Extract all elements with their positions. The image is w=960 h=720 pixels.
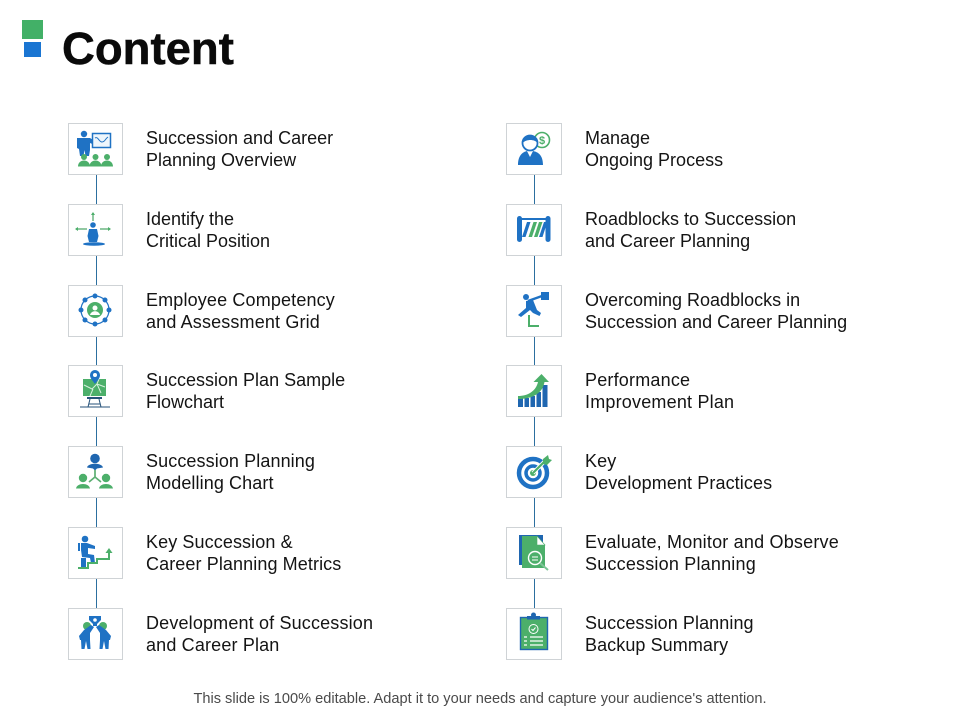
label — [585, 451, 772, 493]
icon: two people lifting a trophy — [68, 608, 123, 660]
label: Backup Summary — [585, 635, 728, 655]
label: Critical Position — [146, 231, 270, 251]
title: Content — [62, 23, 234, 74]
label — [585, 532, 839, 574]
item: Overcoming Roadblocks in Succession and Career Planning — [506, 285, 847, 337]
item: Key Development Practices — [506, 446, 772, 498]
icon: manager with dollar coin — [506, 123, 562, 175]
label: Evaluate, Monitor and Observe — [585, 532, 839, 552]
item: Key Succession & Career Planning Metrics — [68, 527, 341, 579]
label: Development Practices — [585, 473, 772, 493]
label — [146, 128, 333, 170]
label: Succession Planning — [585, 613, 754, 633]
label: Overcoming Roadblocks in — [585, 290, 800, 310]
label — [585, 128, 723, 170]
label: Planning Overview — [146, 150, 296, 170]
item: Succession and Career Planning Overview — [68, 123, 333, 175]
label: Development of Succession — [146, 613, 373, 633]
item: Succession Planning Modelling Chart — [68, 446, 315, 498]
item: Employee Competency and Assessment Grid — [68, 285, 335, 337]
item: Succession Plan Sample Flowchart — [68, 365, 345, 417]
icon: runner leaping hurdle — [506, 285, 562, 337]
label: Succession Plan Sample — [146, 370, 345, 390]
icon: presenter with audience — [68, 123, 123, 175]
label — [146, 532, 341, 574]
label — [146, 451, 315, 493]
item: Succession Planning Backup Summary — [506, 608, 754, 660]
label: Employee Competency — [146, 290, 335, 310]
item: Evaluate, Monitor and Observe Succession Planning — [506, 527, 839, 579]
label — [146, 290, 335, 332]
icon: road barrier — [506, 204, 562, 256]
icon: document with magnifier — [506, 527, 562, 579]
label: Key Succession & — [146, 532, 293, 552]
label — [585, 209, 796, 251]
label: Succession and Career — [146, 128, 333, 148]
icon: manager with dollar coin: $ — [539, 135, 545, 147]
label: and Career Planning — [585, 231, 750, 251]
icon: map on easel with pin — [68, 365, 123, 417]
label: and Assessment Grid — [146, 312, 320, 332]
item: Development of Succession and Career Plan — [68, 608, 373, 660]
item: Manage Ongoing Process — [506, 123, 723, 175]
label: Ongoing Process — [585, 150, 723, 170]
label: Improvement Plan — [585, 392, 734, 412]
label: Key — [585, 451, 616, 471]
label: Flowchart — [146, 392, 224, 412]
label: Manage — [585, 128, 650, 148]
footer note: This slide is 100% editable. Adapt it to your needs and capture your audience's attention. — [193, 691, 767, 707]
icon: person climbing stairs — [68, 527, 123, 579]
label: Performance — [585, 370, 690, 390]
label: and Career Plan — [146, 635, 279, 655]
label — [585, 370, 734, 412]
label — [585, 613, 754, 655]
title accent: stacked squares — [22, 20, 43, 57]
item: Roadblocks to Succession and Career Planning — [506, 204, 796, 256]
icon: target with arrow — [506, 446, 562, 498]
label: Succession and Career Planning — [585, 312, 847, 332]
label — [146, 613, 373, 655]
label: Roadblocks to Succession — [585, 209, 796, 229]
label — [146, 370, 345, 412]
label: Identify the — [146, 209, 234, 229]
icon: competency ring — [68, 285, 123, 337]
icon: clipboard checklist — [506, 608, 562, 660]
icon: hierarchy of people — [68, 446, 123, 498]
label: Modelling Chart — [146, 473, 274, 493]
label — [146, 209, 270, 251]
icon: person with direction arrows — [68, 204, 123, 256]
label: Career Planning Metrics — [146, 554, 341, 574]
label: Succession Planning — [585, 554, 756, 574]
item: Identify the Critical Position — [68, 204, 270, 256]
item: Performance Improvement Plan — [506, 365, 734, 417]
label — [585, 290, 847, 332]
label: Succession Planning — [146, 451, 315, 471]
icon: bars with rising arrow — [506, 365, 562, 417]
